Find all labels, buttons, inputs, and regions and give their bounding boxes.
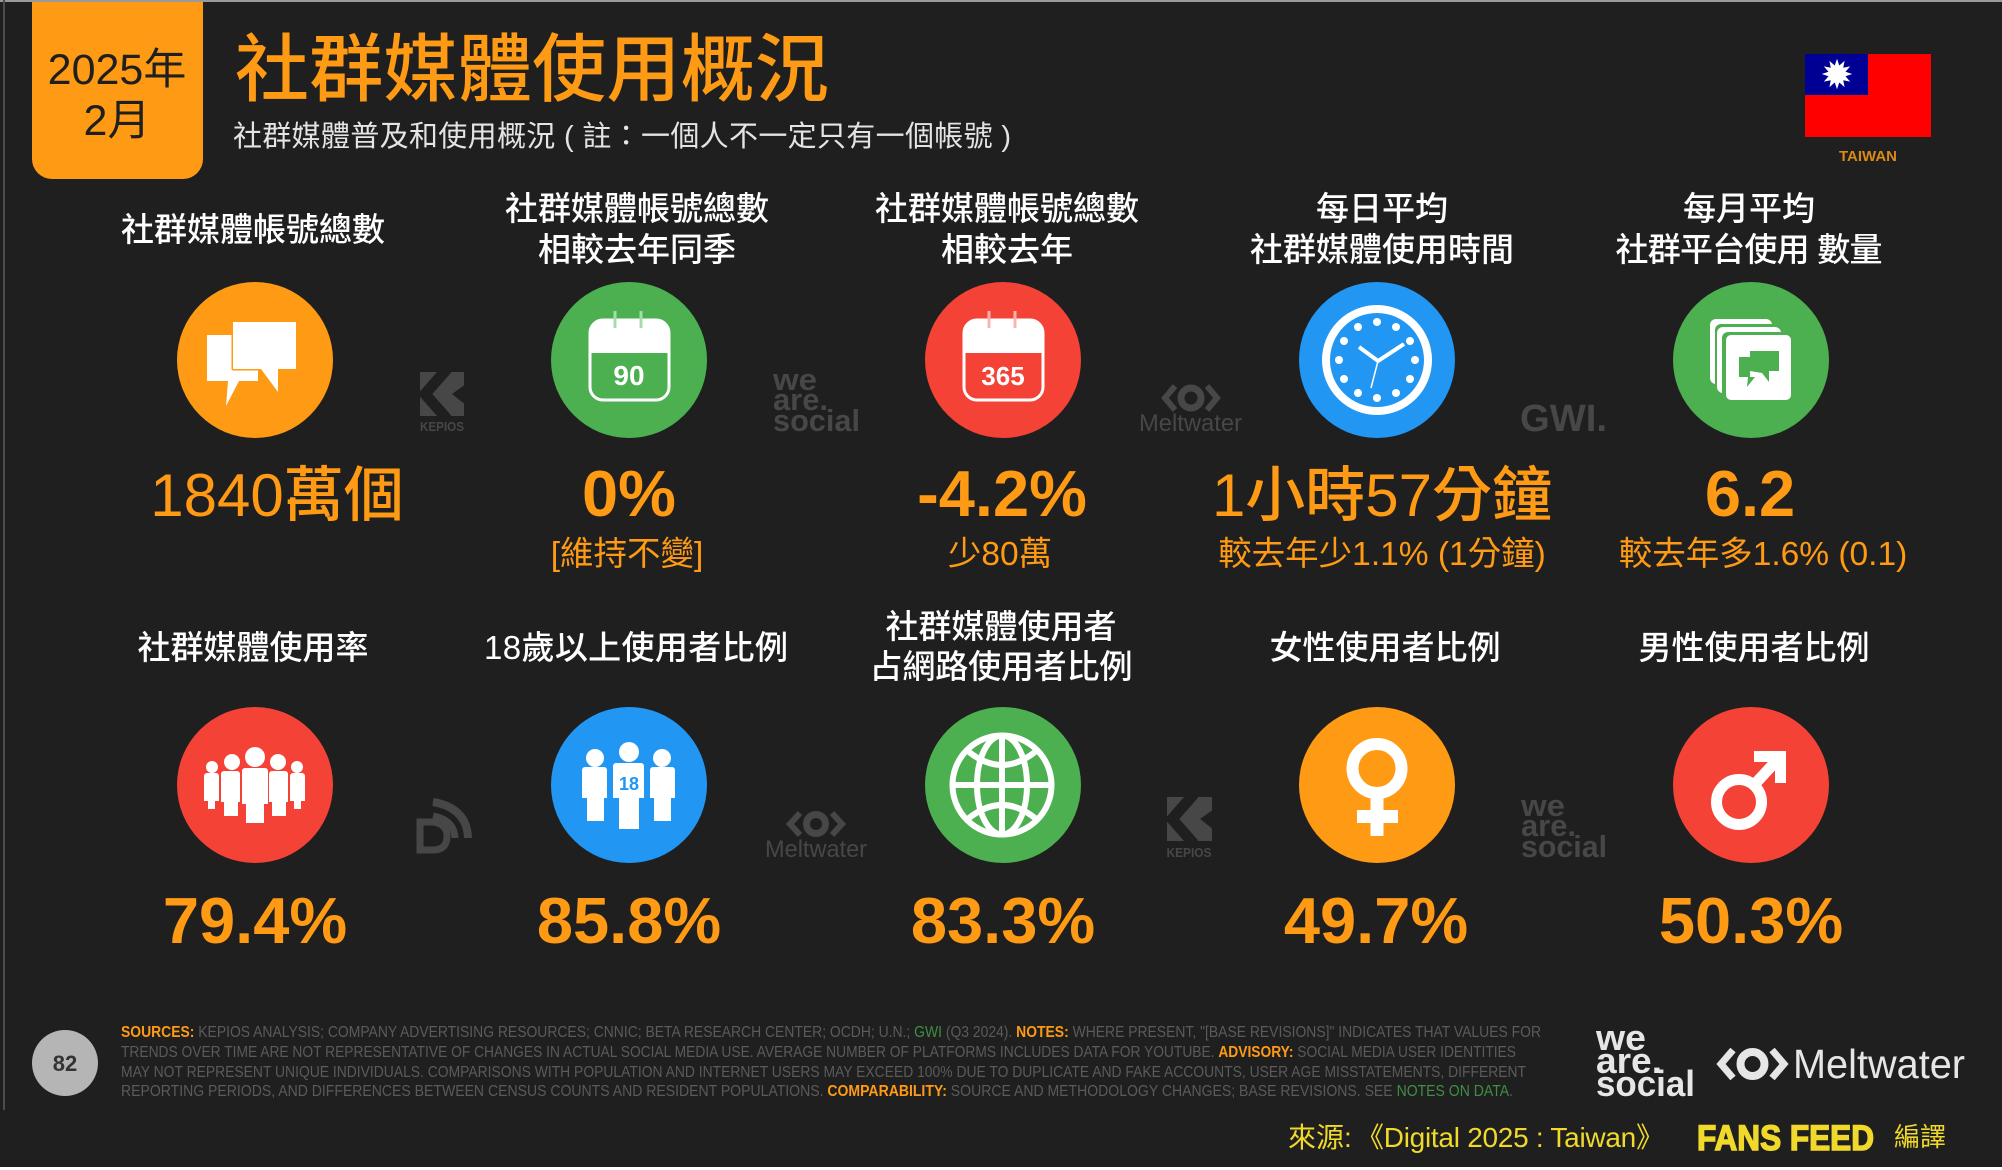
logo: we are social: social [1521, 829, 1607, 864]
logo: we are social: we [1520, 788, 1565, 823]
metric: male share: 男性使用者比例 [1638, 629, 1870, 666]
metric: social media penetration [138, 629, 368, 957]
logo: Meltwater: Meltwater [1139, 410, 1242, 437]
metric: platforms used per month: 6.2 [1705, 457, 1795, 530]
logo: we are social: are. [773, 382, 828, 417]
icon: stacked cards [1673, 282, 1829, 438]
logo: DataReportal [420, 802, 468, 850]
metric: share of internet users: 83.3% [911, 884, 1095, 957]
page number [32, 1030, 98, 1096]
metric: platforms used per month: 每月平均 [1683, 190, 1815, 227]
metric: daily time spent: 每日平均 [1316, 190, 1448, 227]
icon: speech bubbles [177, 282, 333, 438]
logo: Meltwater footer [1721, 1041, 1965, 1087]
metric: accounts vs last year: 社群媒體帳號總數 [875, 190, 1139, 227]
metric: daily time spent: 較去年少1.1% (1分鐘) [1218, 536, 1546, 573]
icon: calendar 90 [551, 282, 707, 438]
logo: Meltwater [765, 813, 867, 863]
logo: Kepios: KEPIOS [420, 419, 464, 434]
metric: daily time spent: 社群媒體使用時間 [1250, 231, 1514, 268]
translator credit: 編譯 [1894, 1122, 1946, 1152]
metric: female share [1270, 629, 1500, 957]
logo: Kepios [1166, 794, 1214, 860]
metric: accounts vs same quarter last year: 社群媒體帳號總數 [505, 190, 769, 227]
metric: accounts vs same quarter last year: 相較去年同季 [538, 231, 736, 268]
icon: crowd of people [177, 707, 333, 863]
icon: female symbol [1299, 707, 1455, 863]
footnotes [121, 1024, 1541, 1100]
metric: share of internet users: 社群媒體使用者 [886, 608, 1116, 645]
logo: we are social footer: we [1595, 1017, 1646, 1058]
icon: calendar 365: 365 [981, 361, 1025, 391]
date badge: 2025年 [48, 46, 186, 94]
metric: accounts vs same quarter last year [505, 190, 769, 573]
subtitle: 社群媒體普及和使用概況 ( 註：一個人不一定只有一個帳號 ) [233, 120, 1011, 153]
icon: calendar 90: 90 [613, 360, 645, 391]
logo: Kepios: KEPIOS [1166, 845, 1212, 860]
metric: social media penetration: 79.4% [163, 884, 347, 957]
metric: social media penetration: 社群媒體使用率 [138, 629, 368, 666]
metric: total social accounts: 1840萬個 [150, 462, 404, 529]
logo: Fans Feed: FANS FEED [1697, 1119, 1874, 1158]
logo: Kepios [420, 369, 466, 434]
metric: share of internet users: 占網路使用者比例 [870, 648, 1132, 685]
footnotes: SOURCES: KEPIOS ANALYSIS; COMPANY ADVERTISING RESOURCES; CNNIC; BETA RESEARCH CENTER; OCDH; U.N.; GWI (Q3 2024). NOTES: WHERE PRESENT, "[BASE REVISIONS]" INDICATES THAT VALUES FOR [121, 1024, 1541, 1041]
metric: share of adults 18+: 85.8% [537, 884, 721, 957]
logo: we are social [772, 362, 860, 438]
date badge [32, 2, 203, 179]
source line: 《Digital 2025 : Taiwan》 [1356, 1122, 1664, 1153]
flag: Taiwan: TAIWAN [1839, 148, 1897, 165]
logo: Meltwater: Meltwater [765, 836, 867, 863]
metric: accounts vs same quarter last year: [維持不變] [551, 536, 703, 573]
logo: we are social [1520, 788, 1607, 864]
logo: we are social footer: social [1596, 1063, 1695, 1104]
metric: share of internet users [870, 608, 1132, 957]
metric: male share [1638, 629, 1870, 957]
metric: accounts vs last year: -4.2% [917, 457, 1087, 530]
metric: daily time spent [1212, 190, 1552, 573]
icon: clock [1299, 282, 1455, 438]
metric: total social accounts [121, 211, 404, 529]
icon: calendar 365 [925, 282, 1081, 438]
footnotes: MAY NOT REPRESENT UNIQUE INDIVIDUALS. COMPARISONS WITH POPULATION AND INTERNET USERS MAY EXCEED 100% DUE TO DUPLICATE AND FAKE ACCOUNTS, USER AGE MISSTATEMENTS, DIFFERENT [121, 1064, 1526, 1081]
metric: female share: 49.7% [1284, 884, 1468, 957]
metric: male share: 50.3% [1659, 884, 1843, 957]
icon: male symbol [1673, 707, 1829, 863]
metric: platforms used per month: 較去年多1.6% (0.1) [1619, 536, 1907, 573]
metric: accounts vs last year: 相較去年 [941, 231, 1073, 268]
logo: Meltwater [1139, 386, 1242, 437]
metric: female share: 女性使用者比例 [1270, 629, 1500, 666]
metric: accounts vs last year: 少80萬 [948, 536, 1052, 573]
logo: GWI: GWI. [1520, 398, 1607, 440]
logo: we are social: we [772, 362, 817, 397]
metric: platforms used per month: 社群平台使用 數量 [1616, 231, 1882, 268]
icon: globe [925, 707, 1081, 863]
metric: share of adults 18+: 18歲以上使用者比例 [484, 629, 788, 666]
metric: daily time spent: 1小時57分鐘 [1212, 462, 1552, 529]
source line: 來源: [1288, 1122, 1352, 1153]
metric: total social accounts: 社群媒體帳號總數 [121, 211, 385, 248]
metric: accounts vs last year [875, 190, 1139, 573]
title: 社群媒體使用概況 [235, 28, 829, 111]
icon: three people with 18 [551, 707, 707, 863]
footnotes: REPORTING PERIODS, AND DIFFERENCES BETWEEN CENSUS COUNTS AND RESIDENT POPULATIONS. COMPARABILITY: SOURCE AND METHODOLOGY CHANGES; BASE REVISIONS. SEE NOTES ON DATA. [121, 1083, 1513, 1100]
logo: we are social: social [773, 403, 860, 438]
metric: accounts vs same quarter last year: 0% [582, 457, 676, 530]
logo: Meltwater footer: Meltwater [1793, 1041, 1965, 1087]
logo: we are social: are. [1521, 808, 1576, 843]
metric: share of adults 18+ [484, 629, 788, 957]
flag: Taiwan [1805, 54, 1931, 165]
footnotes: TRENDS OVER TIME ARE NOT REPRESENTATIVE OF CHANGES IN ACTUAL SOCIAL MEDIA USE. AVERAGE NUMBER OF PLATFORMS INCLUDES DATA FOR YOUTUBE. ADVISORY: SOCIAL MEDIA USER IDENTITIES [121, 1044, 1516, 1061]
date badge: 2月 [84, 97, 150, 145]
icon: three people with 18: 18 [619, 774, 639, 794]
metric: platforms used per month [1616, 190, 1907, 573]
logo: we are social footer: are. [1596, 1040, 1662, 1081]
logo: we are social footer [1595, 1017, 1695, 1104]
page number: 82 [53, 1051, 77, 1076]
